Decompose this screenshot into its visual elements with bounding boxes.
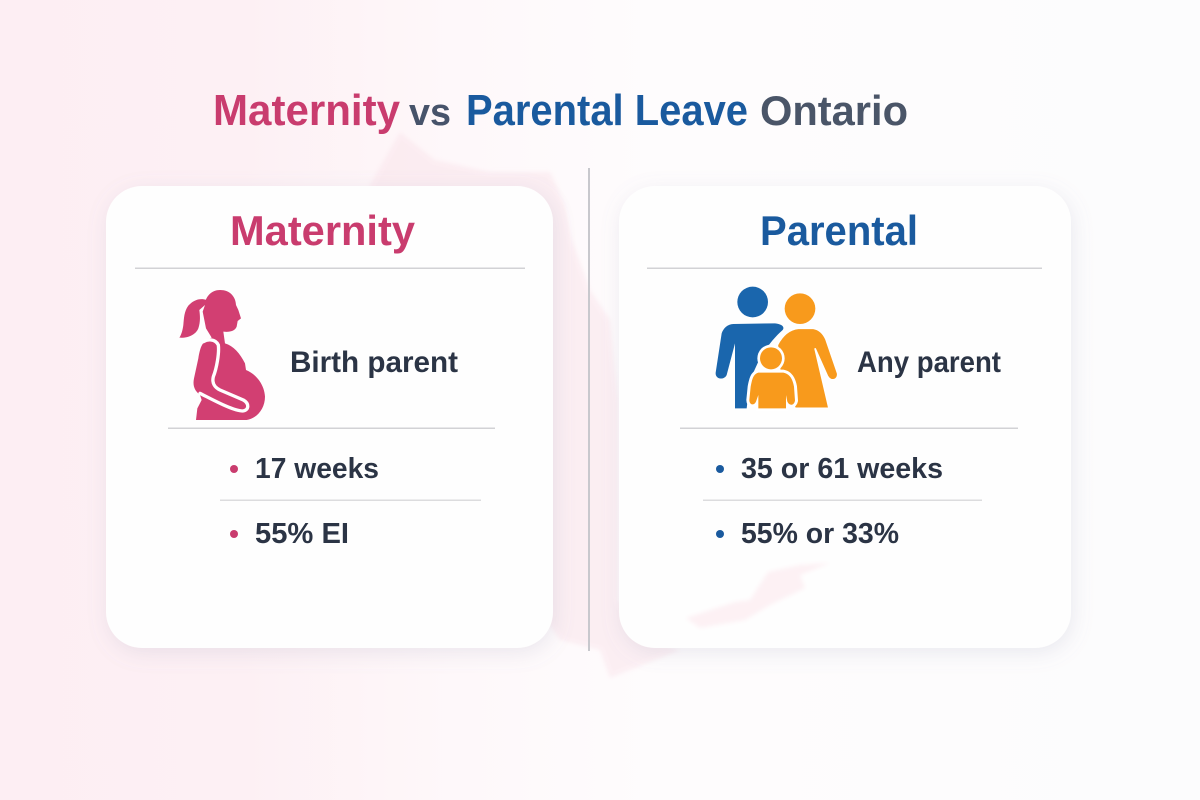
panel heading: Maternity (230, 207, 416, 254)
panel background (106, 186, 553, 648)
panel: parental (619, 186, 1071, 648)
bullet: 17 weeks: 17 weeks (255, 453, 379, 485)
panel heading: Parental (760, 207, 918, 254)
panel: maternity (106, 186, 553, 648)
icon: pregnant person (179, 290, 265, 420)
title: vs (409, 92, 451, 134)
faint map fragment (686, 563, 830, 628)
title: Ontario (760, 87, 908, 134)
divider (588, 168, 590, 651)
title (213, 86, 908, 135)
subject label: Birth parent (290, 346, 458, 379)
title: Maternity (213, 86, 401, 135)
bullet: 35 or 61 weeks: 35 or 61 weeks (741, 453, 943, 485)
subject label: Any parent (857, 346, 1001, 379)
bullet: 55% or 33%: 55% or 33% (741, 518, 899, 550)
icon: family (716, 287, 838, 408)
bullet: 55% EI: 55% EI (255, 518, 349, 550)
panel background (619, 186, 1071, 648)
background map of Ontario (370, 132, 680, 678)
title: Parental Leave (466, 86, 748, 135)
